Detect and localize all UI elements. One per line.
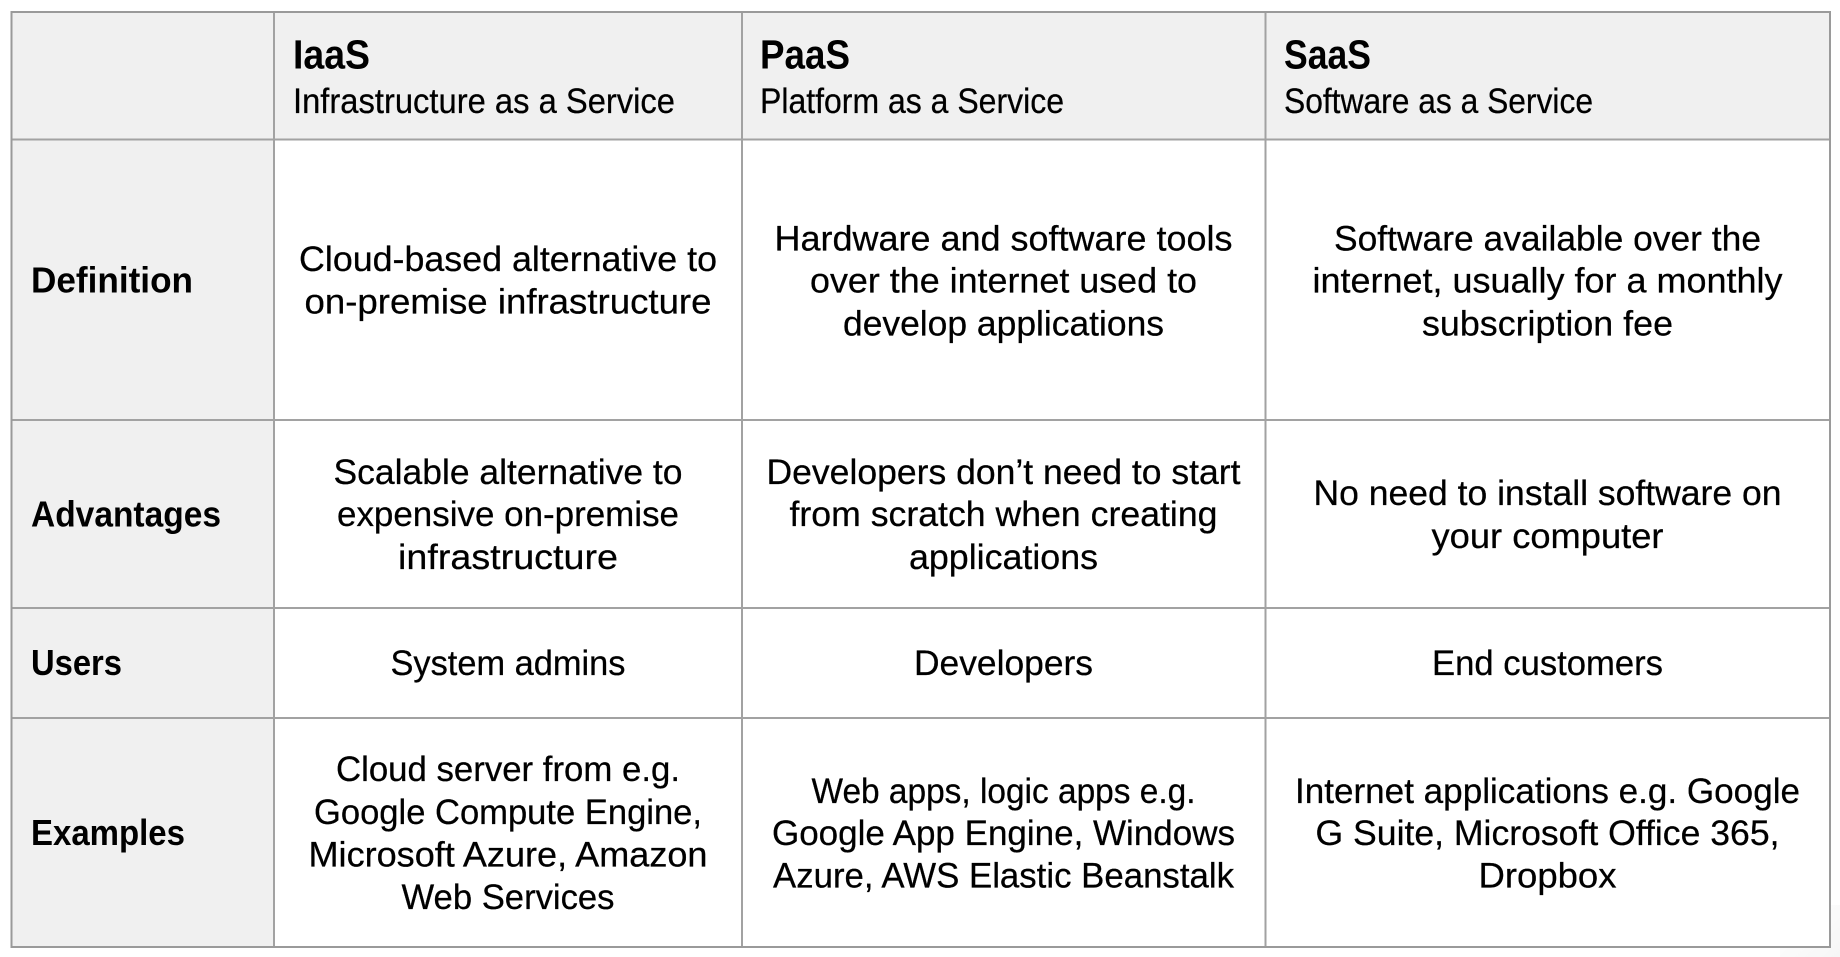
- cell: SaaS users: End customers: [1432, 644, 1663, 683]
- cell: PaaS advantages: applications: [909, 538, 1098, 577]
- cell: IaaS examples: Cloud server from e.g.: [336, 750, 680, 789]
- cell: SaaS definition: subscription fee: [1422, 304, 1673, 344]
- cell: SaaS advantages: your computer: [1432, 517, 1664, 556]
- header: PaaS: [760, 32, 1064, 121]
- header: PaaS: Platform as a Service: [760, 82, 1064, 121]
- cell: SaaS definition: [1312, 220, 1783, 344]
- cell: PaaS definition: [774, 220, 1232, 344]
- header: IaaS: [293, 32, 675, 121]
- cell: IaaS advantages: Scalable alternative to: [334, 453, 682, 492]
- cell: IaaS users: System admins: [390, 644, 626, 683]
- cell: IaaS definition: on-premise infrastructure: [304, 282, 712, 322]
- cell: SaaS examples: Internet applications e.g. Google: [1295, 772, 1800, 811]
- header: IaaS: Infrastructure as a Service: [293, 82, 675, 121]
- row label: Examples: Examples: [31, 812, 185, 853]
- cell: PaaS advantages: Developers don’t need to start: [766, 453, 1241, 492]
- cell: PaaS examples: Azure, AWS Elastic Beanstalk: [773, 856, 1234, 896]
- cell: IaaS definition: Cloud-based alternative to: [299, 240, 717, 279]
- cell: IaaS examples: Google Compute Engine,: [314, 793, 702, 832]
- cell: SaaS advantages: No need to install software on: [1314, 474, 1782, 513]
- cell: IaaS advantages: infrastructure: [398, 538, 618, 577]
- cell: IaaS examples: [308, 750, 708, 917]
- cell: PaaS definition: develop applications: [843, 304, 1164, 344]
- cell: SaaS definition: Software available over the: [1334, 220, 1761, 258]
- cell: SaaS advantages: [1314, 474, 1782, 556]
- cell: PaaS examples: Google App Engine, Windows: [772, 814, 1235, 853]
- cell: IaaS definition: [299, 240, 717, 322]
- header: SaaS: [1284, 32, 1593, 121]
- cell: IaaS examples: Microsoft Azure, Amazon: [308, 836, 708, 874]
- cell: PaaS definition: Hardware and software tools: [774, 220, 1232, 258]
- cell: SaaS examples: [1295, 772, 1800, 896]
- header: SaaS: Software as a Service: [1284, 82, 1593, 121]
- header: IaaS: IaaS: [293, 32, 370, 78]
- cell: IaaS advantages: [334, 453, 682, 577]
- row label: Definition: Definition: [31, 260, 193, 300]
- cell: SaaS examples: Dropbox: [1478, 856, 1617, 896]
- cell: PaaS advantages: [766, 453, 1241, 577]
- cell: SaaS definition: internet, usually for a monthly: [1312, 262, 1783, 300]
- header: PaaS: PaaS: [760, 32, 850, 78]
- cell: IaaS examples: Web Services: [402, 878, 614, 917]
- cell: PaaS definition: over the internet used to: [810, 262, 1197, 300]
- cell: IaaS advantages: expensive on-premise: [337, 495, 679, 534]
- row label: Advantages: Advantages: [31, 494, 221, 534]
- cell: PaaS advantages: from scratch when creating: [790, 495, 1218, 534]
- cell: PaaS examples: Web apps, logic apps e.g.: [812, 772, 1196, 811]
- row label: Users: Users: [31, 642, 122, 683]
- cell: PaaS users: Developers: [914, 644, 1093, 683]
- cell: PaaS examples: [772, 772, 1235, 896]
- cell: SaaS examples: G Suite, Microsoft Office 365,: [1316, 814, 1780, 853]
- header: SaaS: SaaS: [1284, 32, 1371, 78]
